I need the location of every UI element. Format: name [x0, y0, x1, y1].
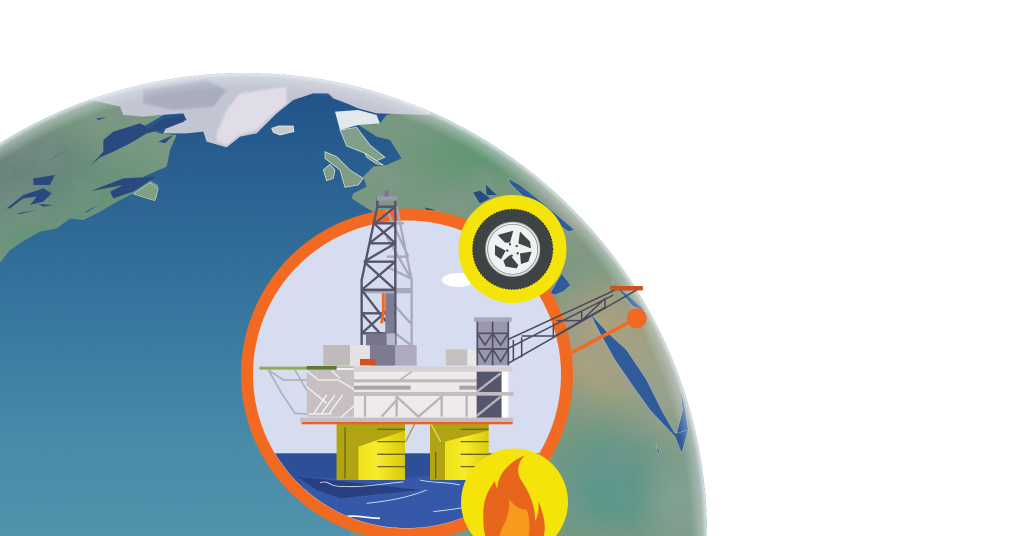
callout dot: [627, 308, 647, 328]
all artwork clipped to frame: [0, 63, 720, 536]
derrick tower: [362, 191, 412, 345]
icon: tyre badge: [458, 195, 566, 303]
globe: [0, 63, 720, 536]
land: Scandinavia: [340, 127, 385, 161]
globe rim shading: [0, 73, 707, 536]
sea: [274, 453, 540, 528]
wave highlights: [320, 480, 467, 518]
crane boom: [508, 289, 637, 363]
land: Newfoundland: [133, 183, 158, 201]
land: Britain: [325, 152, 363, 187]
ice: Scandinavia: [335, 110, 380, 130]
deck equipment: [323, 333, 477, 366]
crane tip: [610, 286, 643, 290]
oil rig: [259, 191, 513, 480]
callout connector line: [571, 321, 629, 354]
ocean: [0, 70, 720, 536]
sea scene: [274, 453, 540, 528]
land: Ireland: [323, 164, 335, 181]
water: inland seas of Europe: [425, 185, 497, 211]
ice cap and Greenland: [7, 63, 497, 214]
land colour washes: [0, 70, 720, 536]
icon: flame badge: [461, 448, 568, 536]
main deck body: [300, 367, 513, 424]
grain overlay: [0, 70, 720, 536]
water: Caspian, Persian Gulf and Red Sea: [508, 178, 688, 453]
infographic illustration: [0, 73, 707, 536]
lattice tower: [474, 317, 512, 365]
island: Iceland: [272, 126, 294, 135]
helideck and left frame: [259, 366, 355, 420]
panel: oil rig callout circle: [247, 214, 567, 534]
icon: cloud: [442, 273, 474, 287]
pontoons: [337, 423, 489, 480]
water: North American lakes and bays: [7, 115, 184, 214]
